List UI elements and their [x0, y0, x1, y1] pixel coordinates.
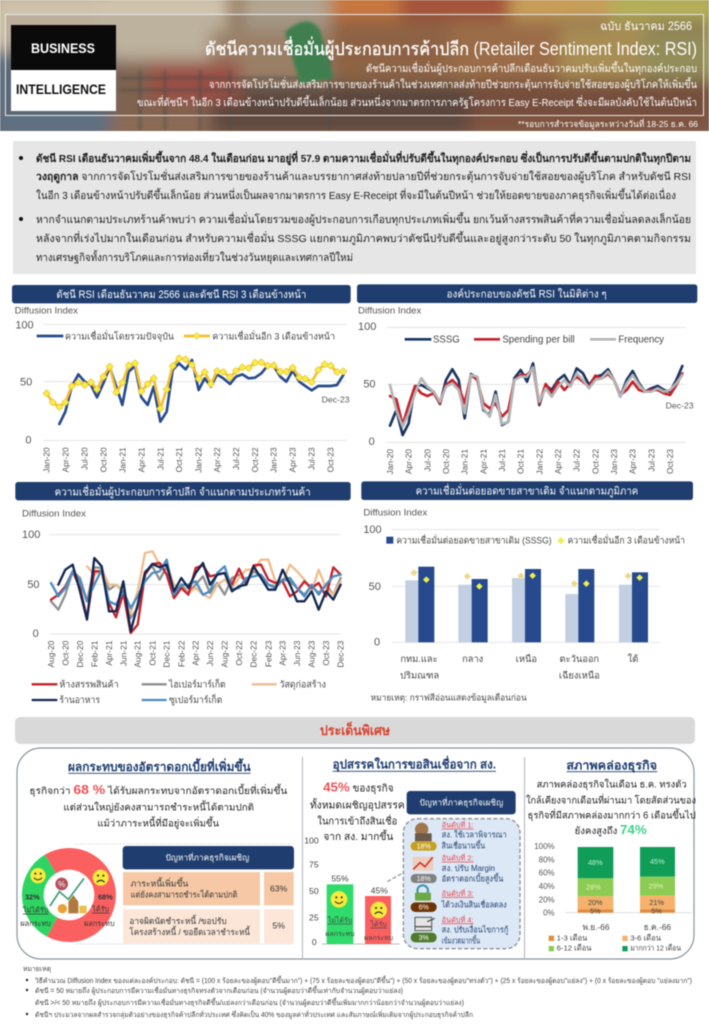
obstacle text: จาก สง. มากขึ้น [323, 829, 393, 843]
stacked bar chart: 100% [534, 842, 555, 851]
legend: SSSG [433, 334, 460, 345]
icon: sad face [93, 870, 109, 886]
legend [37, 329, 335, 342]
chart heading [12, 285, 351, 303]
obstacle text: ทั้งหมดเผชิญอุปสรรค [310, 798, 405, 812]
bar chart: ผลกระทบ [325, 931, 355, 938]
chart: RSI and 3-month-ahead RSI [12, 285, 351, 473]
panel: interest rate impact [20, 757, 294, 944]
obstacle text: 45% ของธุรกิจ [323, 780, 394, 795]
item 2: 18% [417, 876, 431, 883]
legend [386, 533, 685, 545]
chart: RSI components: Diffusion Index [358, 305, 422, 315]
stacked bar chart: 20% [539, 895, 555, 904]
chart heading [361, 481, 693, 500]
stacked bar chart: 20% [588, 898, 603, 907]
panel: business liquidity [526, 758, 696, 953]
item 2: อัตราดอกเบี้ยสูงขึ้น [442, 873, 504, 885]
chart: RSI and 3-month-ahead RSI: Jan-22 [194, 447, 204, 473]
chart: sentiment by store type: Dec-20 [75, 640, 85, 668]
item 1: สง. ใช้เวลาพิจารณา [442, 830, 507, 840]
chart: RSI and 3-month-ahead RSI: Jul-21 [155, 447, 165, 470]
problem list: ปัญหาที่ภาคธุรกิจเผชิญ [419, 797, 503, 809]
donut chart: ได้รับ [91, 905, 110, 914]
chart: RSI components: Jul-21 [497, 449, 507, 472]
chart: sentiment by store type: Dec-21 [162, 640, 172, 668]
panel: special section frame [17, 748, 694, 959]
stacked bar chart: พ.ย.-66 [582, 922, 610, 932]
chart heading [357, 284, 697, 303]
legend [405, 334, 664, 345]
item 2 [411, 853, 504, 885]
chart: RSI and 3-month-ahead RSI: Jan-23 [269, 447, 279, 473]
stacked bar chart: 80% [539, 855, 555, 864]
footnotes: วิธีคำนวณ Diffusion Index ของแต่ละองค์ประกอบ: ดัชนี = (100 x ร้อยละของผู้ตอบ"ดีขึ้นมาก") + (75 x ร้อยละของผู้ตอบ"ดีขึ้น") + (50 x ร้อยละของผู้ตอบ"ทรงตัว") + (25 x ร้อยละของผู้ตอบ"แย่ลง") + (0 x ร้อยละของผู้ตอบ "แย่ลงมาก") [35, 974, 692, 985]
chart: RSI components: Oct-22 [590, 449, 600, 474]
chart: RSI and 3-month-ahead RSI: Oct-23 [326, 447, 336, 472]
problem table: 5% [272, 921, 285, 931]
chart: RSI components: Oct-21 [516, 449, 526, 474]
legend: 3-6 เดือน [630, 933, 662, 942]
chart: RSI components: Apr-22 [553, 449, 563, 474]
footnotes [23, 966, 692, 1019]
panel: key points [13, 141, 696, 274]
problem table [123, 846, 294, 943]
chart: SSSG by region: ใต้ [628, 653, 638, 664]
chart: RSI components: Oct-23 [665, 449, 675, 474]
chart heading: ความเชื่อมั่นต่อยอดขายสาขาเดิม จำแนกตามภูมิภาค [416, 484, 638, 498]
chart: sentiment by store type: Feb-22 [176, 640, 186, 667]
bar chart [304, 835, 399, 947]
chart: SSSG by region: เฉียงเหนือ [559, 670, 600, 681]
chart: RSI components: 100 [358, 321, 376, 333]
chart: SSSG by region: เหนือ [516, 654, 537, 664]
survey footnote: **รอบการสำรวจข้อมูลระหว่างวันที่ 18-25 ธ.ค. 66 [518, 118, 698, 130]
chart: RSI and 3-month-ahead RSI: Oct-20 [98, 447, 108, 472]
legend: 1-3 เดือน [557, 933, 588, 942]
stacked bar chart: 29% [649, 881, 664, 890]
title: ดัชนีความเชื่อมั่นผู้ประกอบการค้าปลีก (Retailer Sentiment Index: RSI) [205, 36, 697, 60]
chart: sentiment by store type: Jun-22 [205, 640, 215, 666]
logo: Business Intelligence: INTELLIGENCE [16, 81, 106, 97]
chart: RSI and 3-month-ahead RSI: Apr-22 [212, 447, 222, 472]
panel heading: อุปสรรคในการขอสินเชื่อจาก สง. [333, 756, 496, 773]
bar chart: ไม่ได้รับ [327, 916, 352, 925]
item 2: สง. ปรับ Margin [442, 863, 495, 873]
stacked bar chart: 45% [650, 857, 665, 866]
chart: RSI and 3-month-ahead RSI: Apr-23 [288, 447, 298, 472]
bar chart: ได้รับ [370, 920, 387, 929]
legend: ความเชื่อมั่นต่อยอดขายสาขาเดิม (SSSG) [396, 533, 552, 545]
legend [32, 677, 326, 706]
chart: sentiment by store type: Apr-21 [104, 640, 114, 666]
chart: sentiment by store type: Oct-23 [321, 640, 331, 666]
chart: RSI and 3-month-ahead RSI: Jul-23 [307, 447, 317, 470]
chart: SSSG by region: Diffusion Index [363, 507, 428, 517]
panel: key points: หลังจากที่เร่งไปมากในเดือนก่อน สำหรับความเชื่อมั่น SSSG แยกตามภูมิภาคพบว่าดัชนีปรับดีขึ้นและอยู่สูงกว่าระดับ 50 ในทุกภูมิภาคตามกิจกรรม [36, 231, 691, 245]
logo: Business Intelligence [11, 25, 116, 111]
chart: sentiment by store type: Jun-23 [292, 640, 302, 666]
footnotes: ดัชนี >/< 50 หมายถึง ผู้ประกอบการมีความเชื่อมั่นทางธุรกิจดีขึ้น/แย่ลงกว่าเดือนก่อน (จำนวนผู้ตอบว่าดีขึ้นเพิ่มมากกว่าน้อยกว่าจำนวนผู้ตอบว่าแย่ลง) [35, 996, 464, 1007]
obstacle text [310, 780, 405, 843]
chart: SSSG by region: 100 [363, 524, 382, 536]
chart: RSI and 3-month-ahead RSI: Oct-22 [250, 447, 260, 472]
legend: ร้านอาหาร [59, 695, 100, 705]
liquidity text: ธุรกิจที่มีสภาพคล่องมากกว่า 6 เดือนขึ้นไป [528, 808, 696, 822]
header banner [0, 0, 709, 140]
impact text [29, 782, 288, 830]
chart: RSI and 3-month-ahead RSI: 0 [25, 434, 31, 446]
chart: RSI components: 0 [369, 436, 375, 448]
donut chart: 68% [98, 892, 113, 901]
donut chart: ผลกระทบ [84, 919, 115, 928]
chart: sentiment by store type: Dec-23 [336, 640, 346, 668]
item 4: 3% [419, 935, 429, 942]
problem table: 63% [270, 884, 288, 894]
footnotes: ดัชนี = 50 หมายถึง ผู้ประกอบการมีความเชื่อมั่นทางธุรกิจทรงตัวจากเดือนก่อน (จำนวนผู้ตอบว่าดีขึ้นเท่ากับจำนวนผู้ตอบว่าแย่ลง) [35, 984, 403, 995]
chart: sentiment by store type: Jun-21 [118, 640, 128, 666]
liquidity text [526, 779, 696, 837]
legend: มากกว่า 12 เดือน [630, 944, 682, 953]
chart: sentiment by store type: Oct-21 [147, 640, 157, 666]
special section heading [15, 717, 695, 744]
chart: sentiment by store type: Diffusion Index [22, 508, 86, 518]
item 3 [411, 885, 507, 912]
chart: RSI components: Jul-22 [572, 449, 582, 472]
chart: RSI components: 50 [363, 378, 376, 390]
item 4: เข้มงวดมากขึ้น [442, 934, 480, 945]
problem table: แต่ยังคงสามารถชำระได้ตามปกติ [131, 890, 237, 900]
chart: SSSG by region: ตะวันออก [560, 654, 599, 664]
chart heading: ดัชนี RSI เดือนธันวาคม 2566 และดัชนี RSI 3 เดือนข้างหน้า [56, 288, 306, 301]
chart: RSI and 3-month-ahead RSI: Jul-22 [231, 447, 241, 470]
bar chart: 55% [331, 873, 349, 883]
legend: ความเชื่อมั่นโดยรวมปัจจุบัน [65, 329, 175, 342]
chart: SSSG by region: 0 [374, 637, 380, 649]
legend: ซูเปอร์มาร์เก็ต [169, 693, 222, 706]
legend: Spending per bill [502, 334, 575, 345]
chart: SSSG by region: กทม.และ [400, 654, 438, 664]
chart: sentiment by store type: Aug-22 [220, 640, 230, 668]
issue date: ฉบับ ธันวาคม 2566 [600, 21, 692, 33]
chart: SSSG by region: ปริมณฑล [400, 671, 439, 681]
chart: RSI components: Jan-23 [609, 449, 619, 474]
item 1: 18% [417, 844, 431, 851]
chart heading [15, 482, 351, 500]
item 4: อันดับที่ 4: [442, 914, 473, 924]
impact text: แม้ว่าภาระหนี้ที่มีอยู่จะเพิ่มขึ้น [97, 816, 219, 830]
legend: 6-12 เดือน [557, 944, 592, 953]
chart: sentiment by store type: Oct-20 [60, 640, 70, 666]
donut chart [20, 859, 115, 931]
legend: Frequency [618, 334, 664, 345]
donut chart: ผลกระทบ [20, 919, 51, 928]
chart: sentiment by store type: 100 [22, 529, 40, 541]
problem table: ภาระหนี้เพิ่มขึ้น [131, 877, 188, 889]
chart: sentiment by store type: 50 [27, 579, 40, 591]
chart: RSI and 3-month-ahead RSI: Jul-20 [80, 447, 90, 470]
chart: RSI and 3-month-ahead RSI: Jan-21 [117, 447, 127, 473]
problem table: ปัญหาที่ภาคธุรกิจเผชิญ [165, 852, 249, 864]
chart: RSI and 3-month-ahead RSI: Apr-21 [136, 447, 146, 472]
bar chart: 45% [371, 885, 388, 895]
item 1: อันดับที่ 1: [442, 820, 473, 830]
item 2: อันดับที่ 2: [442, 853, 473, 863]
stacked bar chart: ธ.ค.-66 [644, 922, 671, 932]
chart: RSI and 3-month-ahead RSI: Oct-21 [174, 447, 184, 472]
legend: ความเชื่อมั่นอีก 3 เดือนข้างหน้า [212, 329, 335, 341]
legend: ไฮเปอร์มาร์เก็ต [168, 677, 226, 689]
liquidity text: สภาพคล่องธุรกิจในเดือน ธ.ค. ทรงตัว [537, 779, 687, 791]
panel: credit obstacles [304, 756, 520, 949]
stacked bar chart: 28% [586, 882, 601, 891]
chart: RSI components: Apr-23 [628, 449, 638, 474]
legend: ความเชื่อมั่นอีก 3 เดือนข้างหน้า [568, 533, 685, 545]
chart: RSI components: Jan-21 [460, 449, 470, 474]
chart: RSI components: Oct-20 [441, 449, 451, 474]
impact text: ธุรกิจกว่า 68 % ได้รับผลกระทบจากอัตราดอกเบี้ยที่เพิ่มขึ้น [29, 782, 288, 797]
item 1: สินเชื่อนานขึ้น [442, 839, 485, 850]
item 3: อันดับที่ 3: [442, 888, 473, 898]
chart: RSI components: Jul-23 [646, 449, 656, 472]
bars [405, 567, 648, 642]
chart: sentiment by store type: Oct-22 [234, 640, 244, 666]
donut chart: ไม่ได้รับ [22, 906, 49, 915]
chart: sentiment by store type: Dec-22 [249, 640, 259, 668]
icon: chart and money: % [58, 880, 65, 889]
chart: RSI components [357, 284, 697, 474]
liquidity text: ยังคงสูงถึง 74% [575, 822, 647, 837]
chart: RSI and 3-month-ahead RSI: Dec-23 [322, 395, 350, 405]
chart: RSI components: Apr-21 [478, 449, 488, 474]
chart: sentiment by store type [15, 482, 351, 706]
icon: happy face [30, 868, 46, 883]
legend: ห้างสรรพสินค้า [59, 679, 119, 689]
chart: RSI components: Dec-23 [666, 400, 694, 410]
legend: วัสดุก่อสร้าง [279, 679, 326, 690]
chart: SSSG by region [361, 481, 693, 703]
problem table: อาจผิดนัดชำระหนี้ /ขอปรับ [129, 914, 227, 926]
item 3: 6% [419, 905, 429, 912]
chart: RSI and 3-month-ahead RSI: 100 [15, 319, 34, 331]
panel heading: สภาพคล่องธุรกิจ [566, 758, 657, 773]
problem list [387, 791, 520, 949]
chart: RSI and 3-month-ahead RSI: 50 [20, 377, 32, 389]
chart: sentiment by store type: 0 [33, 628, 39, 640]
header summary [137, 61, 697, 109]
stacked bar chart: 5% [651, 906, 662, 915]
panel heading: ผลกระทบของอัตราดอกเบี้ยที่เพิ่มขึ้น [68, 757, 251, 774]
chart heading: องค์ประกอบของดัชนี RSI ในมิติต่าง ๆ [447, 288, 607, 301]
chart note: หมายเหตุ: กราฟสีอ่อนแสดงข้อมูลเดือนก่อน [371, 692, 527, 703]
panel: key points: วงฤดูกาล จากการจัดโปรโมชั่นส่งเสริมการขายของร้านค้าและบรรยากาศส่งท้ายปลายปีที่ช่วยกระตุ้นการจับจ่ายใช้สอยของผู้บริโภค สำหรับดัชนี RSI [36, 169, 691, 184]
item 4 [411, 914, 508, 945]
footnotes: ดัชนีฯ ประมวลจากผลสำรวจกลุ่มตัวอย่างของธุรกิจค้าปลีกทั่วประเทศ ซึ่งคิดเป็น 40% ของมูลค่าทั่วประเทศ และสัมภาษณ์เพิ่มเติมจากผู้ประกอบธุรกิจค้าปลีก [35, 1010, 473, 1019]
panel: key points: หากจำแนกตามประเภทร้านค้าพบว่า ความเชื่อมั่นโดยรวมของผู้ประกอบการเกือบทุกประเภทเพิ่มขึ้น ยกเว้นห้างสรรพสินค้าที่ความเชื่อมั่นลดลงเล็กน้อย [36, 212, 691, 226]
chart: sentiment by store type: Feb-21 [89, 640, 99, 667]
chart: RSI components: Apr-20 [404, 449, 414, 474]
chart: SSSG by region: 50 [369, 581, 381, 593]
stacked bar chart: 48% [588, 858, 603, 867]
chart heading: ความเชื่อมั่นผู้ประกอบการค้าปลีก จำแนกตามประเภทร้านค้า [55, 484, 311, 498]
stacked bar chart [534, 842, 692, 953]
stacked bar chart: 5% [590, 906, 601, 915]
chart: sentiment by store type: Apr-22 [191, 640, 201, 666]
footnotes: หมายเหตุ [23, 966, 51, 973]
stacked bar chart: 0% [543, 909, 555, 918]
obstacle text: ในการเข้าถึงสินเชื่อ [317, 814, 397, 828]
stacked bar chart: 40% [539, 882, 555, 891]
chart: sentiment by store type: Feb-23 [263, 640, 273, 667]
donut chart: 32% [25, 892, 40, 901]
special section heading: ประเด็นพิเศษ [320, 721, 390, 738]
panel: key points: ดัชนี RSI เดือนธันวาคมเพิ่มขึ้นจาก 48.4 ในเดือนก่อน มาอยู่ที่ 57.9 ตามความเชื่อมั่นที่ปรับดีขึ้นในทุกองค์ประกอบ ซึ่งเป็นการปรับดีขึ้นตามปกติในทุกปีตาม [36, 150, 691, 166]
chart: RSI components: Jan-20 [385, 449, 395, 474]
chart: sentiment by store type: Aug-20 [46, 640, 56, 668]
panel: key points: ทางเศรษฐกิจทั้งการบริโภคและการท่องเที่ยวในช่วงวันหยุดและเทศกาลปีใหม่ [36, 250, 353, 264]
stacked bar chart: 21% [649, 898, 664, 907]
chart: sentiment by store type: Apr-23 [278, 640, 288, 666]
stacked bar chart: 60% [539, 869, 555, 878]
chart: sentiment by store type: Aug-23 [307, 640, 317, 668]
bar chart: 75 [309, 859, 319, 869]
bar chart: ผลกระทบ [364, 935, 393, 942]
item 3: ได้วงเงินสินเชื่อลดลง [441, 898, 507, 909]
chart: RSI and 3-month-ahead RSI: Apr-20 [60, 447, 70, 472]
panel: key points: ในอีก 3 เดือนข้างหน้าปรับดีขึ้นเล็กน้อย ส่วนหนึ่งเป็นผลจากมาตรการ Easy E-Receipt ที่จะมีในต้นปีหน้า ช่วยให้ยอดขายของภาคธุรกิจเพิ่มขึ้นได้ต่อเนื่อง [36, 188, 676, 202]
problem table: โครงสร้างหนี้ / ขอยืดเวลาชำระหนี้ [129, 925, 251, 937]
legend [549, 933, 682, 953]
chart: sentiment by store type: Aug-21 [133, 640, 143, 668]
bar chart: 100 [304, 835, 319, 845]
bar chart: 0 [312, 937, 317, 947]
bar chart: 50 [309, 886, 319, 896]
chart: RSI components: Jan-22 [534, 449, 544, 474]
item 1 [411, 820, 507, 851]
liquidity text: ใกล้เคียงจากเดือนที่ผ่านมา โดยสัดส่วนของ [526, 793, 696, 806]
logo: Business Intelligence: BUSINESS [31, 40, 95, 56]
chart: RSI components: Jul-20 [422, 449, 432, 472]
chart: RSI and 3-month-ahead RSI: Jan-20 [42, 447, 52, 473]
chart: SSSG by region: กลาง [462, 654, 483, 664]
chart: RSI and 3-month-ahead RSI: Diffusion Index [15, 306, 78, 316]
item 4: สง. ปรับเงื่อนไขการกู้ [442, 924, 508, 936]
bar chart: 25 [309, 913, 319, 923]
impact text: แต่ส่วนใหญ่ยังคงสามารถชำระหนี้ได้ตามปกติ [63, 800, 254, 814]
